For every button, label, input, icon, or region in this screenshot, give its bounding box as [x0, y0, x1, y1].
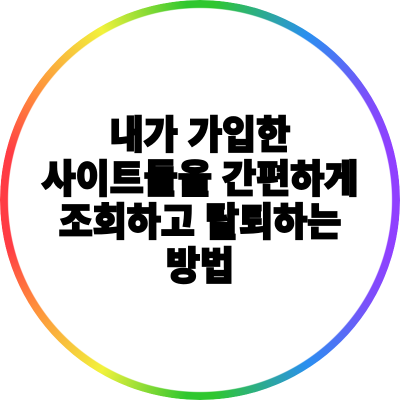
title line 4: 방법	[166, 245, 234, 288]
title line 2: 사이트들을 간편하게	[42, 157, 358, 200]
title line 3: 조회하고 탈퇴하는	[59, 201, 341, 244]
title line 1: 내가 가입한	[110, 114, 290, 157]
